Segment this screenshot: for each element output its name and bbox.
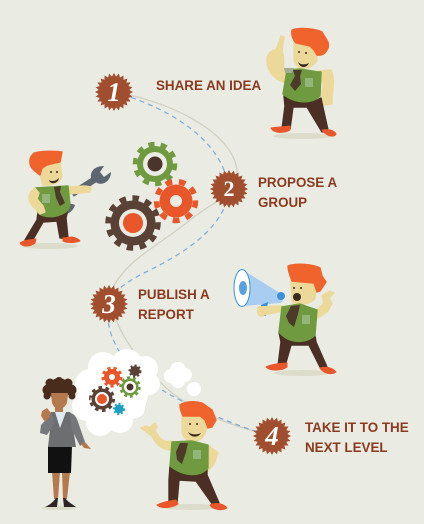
character: woman in suit xyxy=(40,377,91,510)
character: man with megaphone xyxy=(234,264,336,376)
step 3 label: PUBLISH A xyxy=(138,287,210,302)
step 2 label: PROPOSE A xyxy=(258,175,337,190)
step 4 label: NEXT LEVEL xyxy=(305,440,388,455)
step 3 label: REPORT xyxy=(138,307,195,322)
step 2 badge: 2 xyxy=(224,176,234,201)
cloud gear: green xyxy=(120,378,140,396)
character: pointing man xyxy=(267,29,336,139)
step 1 badge xyxy=(95,73,133,111)
cloud gear: small dark xyxy=(130,366,140,376)
character: man with wrench xyxy=(20,151,111,249)
gear: green xyxy=(135,144,175,184)
step 1 label: SHARE AN IDEA xyxy=(156,78,261,93)
gear: large brown xyxy=(108,198,158,248)
connecting path: dashed blue curve xyxy=(108,92,272,436)
character: man gesturing xyxy=(141,402,227,510)
step 1 badge: 1 xyxy=(107,77,121,107)
step 2 label: GROUP xyxy=(258,195,307,210)
step 4 badge xyxy=(253,417,291,455)
gear: orange xyxy=(156,182,196,220)
step 2 badge xyxy=(210,170,248,208)
connecting path: solid grey curve xyxy=(111,92,272,436)
cloud gear: small blue xyxy=(114,404,124,414)
step 4 label: TAKE IT TO THE xyxy=(305,420,409,435)
thought cloud with gears xyxy=(72,349,160,436)
step 3 badge: 3 xyxy=(101,289,116,319)
step 4 badge: 4 xyxy=(264,421,279,451)
cloud gear: brown xyxy=(90,388,114,410)
small thought cloud xyxy=(164,362,201,396)
cloud gear: orange xyxy=(103,368,121,386)
step 3 badge xyxy=(90,285,128,323)
